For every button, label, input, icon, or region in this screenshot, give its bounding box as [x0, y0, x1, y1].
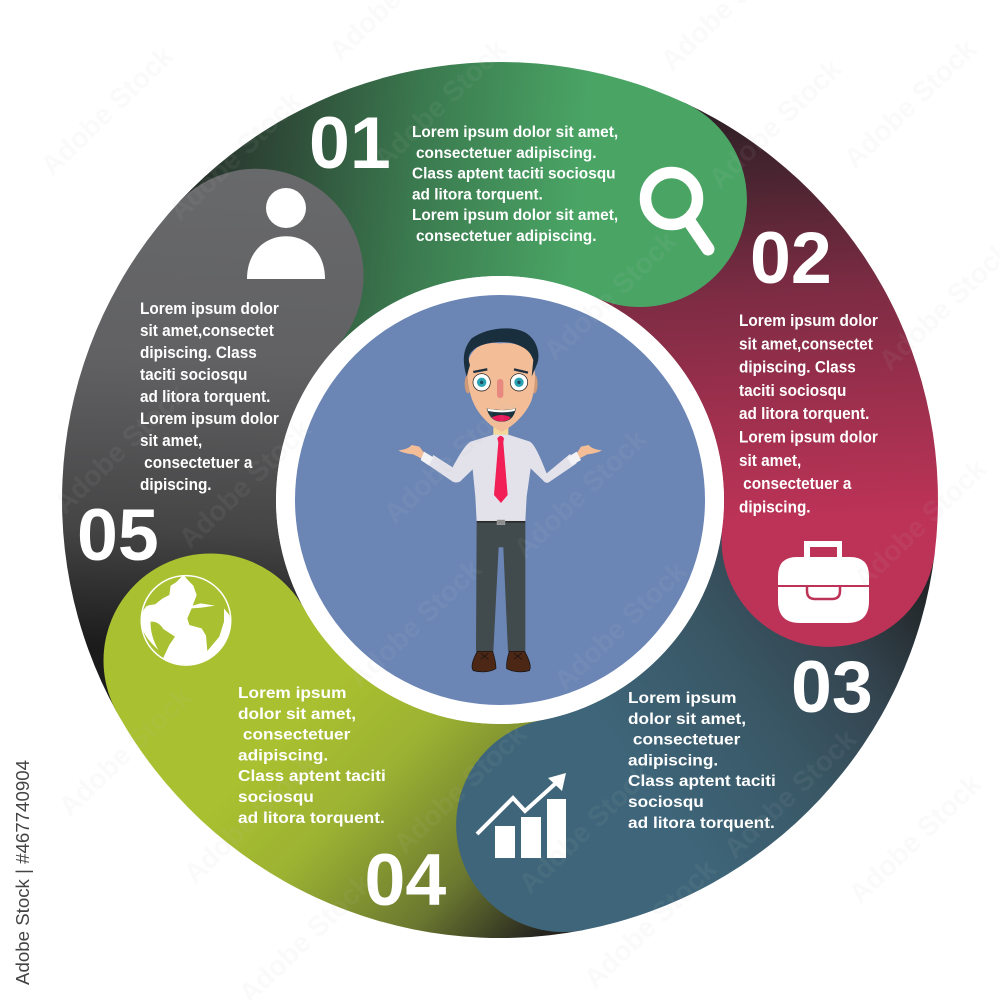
- segment 02 text: consectetuer a: [743, 476, 852, 493]
- stock image watermark: Adobe Stock: [538, 225, 683, 366]
- segment 05 text: taciti sociosqu: [140, 367, 247, 384]
- segment 05 text: dipiscing.: [140, 477, 212, 494]
- segment 05 number: 05: [77, 493, 159, 576]
- stock image watermark: Adobe Stock: [548, 555, 693, 696]
- segment 03 number: 03: [791, 645, 873, 728]
- stock image watermark: Adobe Stock: [508, 423, 653, 564]
- stock image watermark: Adobe Stock: [703, 53, 848, 194]
- segment 04 text: consectetuer: [243, 725, 351, 743]
- stock image watermark: Adobe Stock: [173, 413, 318, 554]
- segment 03 text: Lorem ipsum: [628, 689, 736, 707]
- segment 03 text: adipiscing.: [628, 751, 718, 769]
- icon: person: [247, 188, 325, 279]
- stock image credit: Adobe Stock | #467740904: [13, 760, 33, 985]
- segment 02 text: dipiscing.: [739, 499, 811, 517]
- segment 01 text: consectetuer adipiscing.: [416, 145, 596, 162]
- segment 04 text: sociosqu: [238, 788, 314, 806]
- left eyebrow: [473, 369, 487, 372]
- right cuff: [567, 452, 581, 465]
- left ear: [465, 375, 471, 393]
- segment 04 text: dolor sit amet,: [238, 704, 356, 723]
- central white ring: [276, 276, 724, 724]
- segment 05 text: sit amet,: [140, 433, 202, 450]
- businessman character: [398, 328, 602, 672]
- stock image watermark: Adobe Stock: [178, 748, 323, 889]
- segment 01 text: Lorem ipsum dolor sit amet,: [412, 124, 618, 141]
- right shoe: [507, 651, 530, 672]
- segment 05 text: consectetuer a: [144, 455, 253, 472]
- segment 05 text: dipiscing. Class: [140, 345, 257, 362]
- legs and trousers: [476, 522, 525, 652]
- icon: magnifying glass: [646, 172, 708, 249]
- segment 03 text: sociosqu: [628, 793, 704, 811]
- segment 02 text: dipiscing. Class: [739, 359, 856, 377]
- stock image watermark: Adobe Stock: [843, 768, 988, 909]
- stock image watermark: Adobe Stock: [53, 681, 198, 822]
- segment 01 band: [180, 62, 747, 347]
- neck: [493, 425, 508, 437]
- central blue disc: [295, 295, 705, 705]
- stock image watermark: Adobe Stock: [578, 853, 723, 994]
- left eye: [473, 374, 490, 391]
- stock image watermark: Adobe Stock: [388, 718, 533, 859]
- segment 03 text: ad litora torquent.: [628, 813, 775, 832]
- segment 03 text: Class aptent taciti: [628, 772, 776, 790]
- segment 02 text: sit amet,: [739, 452, 801, 470]
- stock image watermark: Adobe Stock: [378, 388, 523, 529]
- stock image watermark: Adobe Stock: [163, 85, 308, 226]
- segment 03 text: consectetuer: [633, 730, 741, 748]
- segment 04 text: Lorem ipsum: [238, 684, 346, 702]
- right ear: [531, 375, 538, 393]
- right eye: [510, 374, 528, 391]
- belt: [477, 521, 525, 523]
- segment 01 text: ad litora torquent.: [412, 186, 543, 203]
- nose: [497, 379, 503, 398]
- belt buckle: [497, 520, 505, 525]
- stock image watermark: Adobe Stock: [368, 33, 513, 174]
- segment 05 text: Lorem ipsum dolor: [140, 301, 279, 318]
- stock image watermark: Adobe Stock: [513, 758, 658, 899]
- stock image watermark: Adobe Stock: [838, 33, 983, 174]
- left cuff: [421, 452, 433, 465]
- segment 01 number: 01: [309, 101, 391, 184]
- tie: [494, 436, 508, 503]
- segment 01 text: Lorem ipsum dolor sit amet,: [412, 207, 618, 224]
- right eyebrow: [514, 369, 528, 373]
- mouth: [487, 408, 516, 422]
- segment 05 text: Lorem ipsum dolor: [140, 411, 279, 428]
- stock image watermark: Adobe Stock: [848, 453, 993, 594]
- left shoe: [472, 651, 496, 672]
- stock image watermark: Adobe Stock: [343, 553, 488, 694]
- segment 02 text: Lorem ipsum dolor: [739, 429, 878, 447]
- segment 02 number: 02: [750, 216, 832, 299]
- right hand: [577, 445, 602, 459]
- tongue: [492, 415, 511, 421]
- segment 02 text: ad litora torquent.: [739, 406, 869, 423]
- icon: growth chart: [477, 773, 566, 858]
- shirt: [428, 435, 577, 521]
- segment 01 text: Class aptent taciti sociosqu: [412, 166, 616, 183]
- stock image watermark: Adobe Stock: [35, 40, 180, 181]
- segment 04 rounded head: [104, 554, 318, 768]
- segment 01 text: consectetuer adipiscing.: [416, 228, 596, 245]
- teeth: [487, 409, 515, 412]
- segment 02 band: [595, 103, 938, 647]
- segment 02 text: Lorem ipsum dolor: [739, 313, 878, 330]
- segment 02 text: taciti sociosqu: [739, 382, 846, 400]
- segment 04 text: ad litora torquent.: [238, 808, 385, 827]
- face: [468, 343, 535, 432]
- segment 05 band: [62, 169, 364, 712]
- hair: [464, 328, 538, 377]
- segment 03 band: [456, 527, 935, 932]
- segment 05 text: sit amet,consectet: [140, 323, 274, 340]
- segment 04 text: Class aptent taciti: [238, 767, 386, 785]
- left hand: [398, 445, 425, 459]
- segment 02 text: sit amet,consectet: [739, 336, 873, 353]
- segment 04 text: adipiscing.: [238, 746, 328, 764]
- segment 04 band: [103, 553, 584, 938]
- segment 04 number: 04: [364, 838, 446, 921]
- stock image watermark: Adobe Stock: [48, 378, 193, 519]
- icon: briefcase: [778, 541, 869, 623]
- icon: globe: [140, 575, 231, 666]
- stock image watermark: Adobe Stock: [718, 723, 863, 864]
- segment 03 text: dolor sit amet,: [628, 709, 746, 728]
- segment 05 text: ad litora torquent.: [140, 389, 270, 406]
